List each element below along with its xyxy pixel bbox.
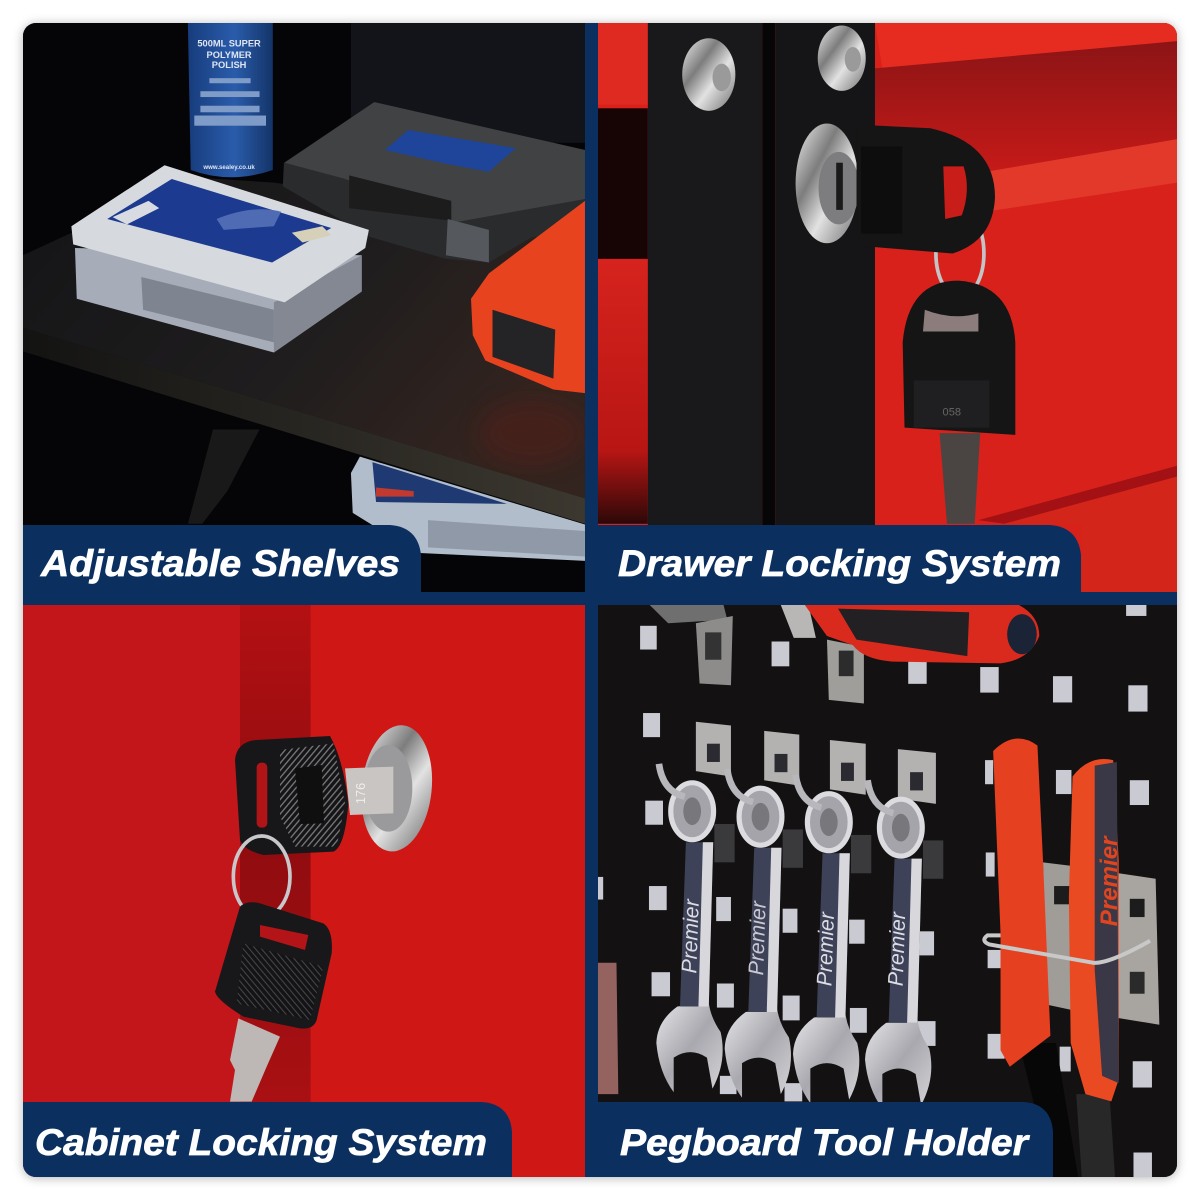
label: drawer locking system <box>598 525 1081 592</box>
polish bottle: POLISH <box>212 60 247 70</box>
lower key <box>903 281 1015 524</box>
left edge hanger <box>598 963 618 1094</box>
right plier handle <box>1069 759 1123 1101</box>
polish bottle <box>188 23 273 177</box>
lower key: 058 <box>943 407 961 419</box>
plier wires <box>1019 1043 1115 1177</box>
cabinet key ring <box>233 836 290 917</box>
lock barrel <box>796 124 859 243</box>
lower parts box <box>351 457 585 561</box>
left plier handle <box>993 738 1050 1067</box>
panel: cabinet locking system <box>23 605 585 1177</box>
grey case <box>283 102 585 263</box>
wrench 17: Premier <box>812 911 839 987</box>
bolt left <box>682 38 735 111</box>
label: adjustable shelves: Adjustable Shelves <box>40 543 400 584</box>
shelf reflection <box>478 400 586 466</box>
lower cabinet key <box>215 902 332 1102</box>
upper cabinet key <box>235 736 348 855</box>
label: drawer locking system: Drawer Locking System <box>618 543 1061 584</box>
wrench 18: Premier <box>744 900 771 976</box>
hanger slots <box>707 744 923 790</box>
polish bottle: POLYMER <box>207 50 252 60</box>
key ring <box>934 233 986 285</box>
cabinet lock: 176 <box>354 783 368 804</box>
pegboard holes <box>598 605 1152 1177</box>
wrench 17 <box>793 775 871 1103</box>
wrench hangers <box>696 722 936 804</box>
divider lines <box>585 413 1177 1177</box>
label: pegboard tool holder: Pegboard Tool Holder <box>620 1122 1031 1163</box>
panel: adjustable shelves <box>23 23 586 592</box>
bolt right <box>818 26 866 91</box>
wrench 19: Premier <box>677 898 704 974</box>
polish bottle: 500ML SUPER <box>197 39 261 49</box>
cabinet lock <box>345 725 432 852</box>
shelf front edge <box>23 328 585 524</box>
side plates <box>1043 862 1159 1025</box>
cable <box>188 429 260 524</box>
panel: drawer locking system <box>598 23 1177 592</box>
orange case <box>471 201 585 393</box>
screwdriver <box>781 605 1039 663</box>
polish bottle: www.sealey.co.uk <box>202 164 255 171</box>
shelf surface <box>23 177 585 498</box>
label: cabinet locking system <box>23 1102 512 1177</box>
clear box <box>71 165 369 353</box>
wrench 16: Premier <box>884 911 910 987</box>
label: cabinet locking system: Cabinet Locking System <box>35 1122 487 1163</box>
label: adjustable shelves <box>23 525 421 592</box>
panel: pegboard tool holder <box>598 605 1177 1177</box>
wrench 19 <box>656 764 735 1092</box>
right plier handle: Premier <box>1096 835 1123 926</box>
top hangers <box>650 605 864 704</box>
upper key <box>857 125 995 253</box>
label: pegboard tool holder <box>598 1102 1053 1177</box>
black frame <box>648 23 875 531</box>
wrench 18 <box>725 769 803 1098</box>
wrench 16 <box>865 780 943 1109</box>
wire holder <box>984 935 1150 963</box>
